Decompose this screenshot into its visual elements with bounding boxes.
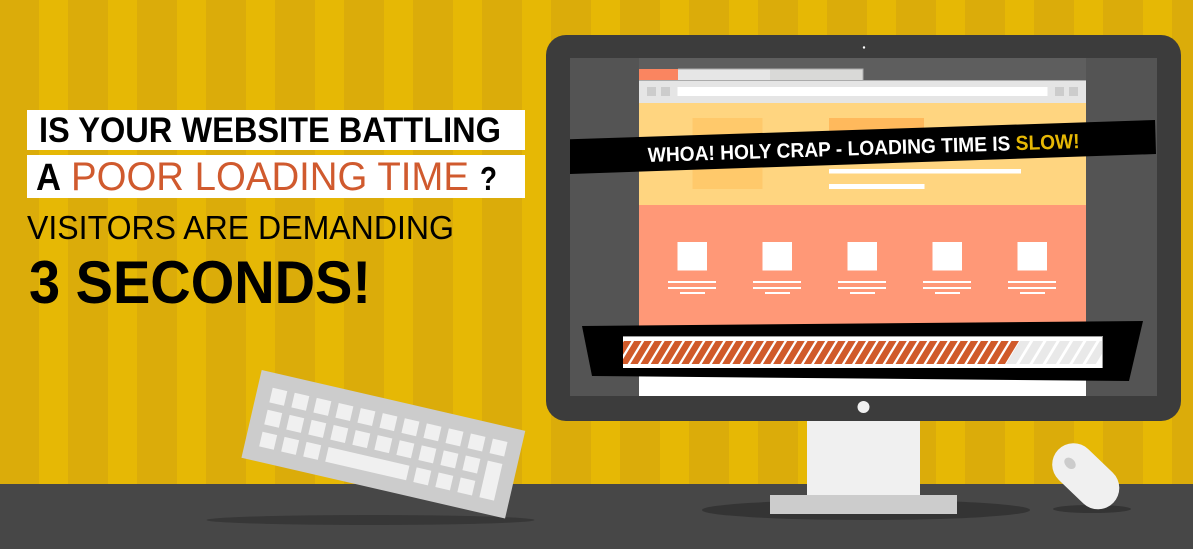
key figure: 3 seconds: 3 SECONDS!	[29, 249, 371, 316]
loading bar panel	[582, 321, 1143, 381]
headline line 2: A	[36, 157, 61, 199]
monitor stand	[770, 420, 957, 514]
monitor	[546, 35, 1181, 421]
browser window	[639, 58, 1086, 396]
headline line 1: IS YOUR WEBSITE BATTLING	[39, 111, 501, 150]
page hero section	[639, 103, 1086, 205]
monitor stand shadow	[702, 500, 1030, 520]
desk floor	[0, 484, 1193, 549]
page features section	[639, 205, 1086, 330]
browser tabs	[639, 68, 864, 81]
power button	[858, 401, 870, 413]
icon: keyboard	[241, 370, 525, 519]
camera dot	[863, 46, 865, 49]
keyboard shadow	[206, 515, 534, 525]
headline	[27, 110, 525, 316]
headline line 2: ?	[480, 160, 497, 197]
screen	[570, 58, 1157, 396]
monitor bezel	[546, 35, 1181, 421]
icon: mouse	[1062, 455, 1098, 488]
headline line 2: POOR LOADING TIME	[71, 155, 469, 199]
subheading: VISITORS ARE DEMANDING	[27, 210, 454, 247]
mouse shadow	[1053, 505, 1131, 513]
browser toolbar	[639, 80, 1086, 103]
banner: loading time is slow	[570, 120, 1156, 174]
page footer	[639, 330, 1086, 396]
progress bar	[600, 336, 1110, 368]
banner text: WHOA! HOLY CRAP - LOADING TIME IS SLOW!	[647, 130, 1080, 167]
